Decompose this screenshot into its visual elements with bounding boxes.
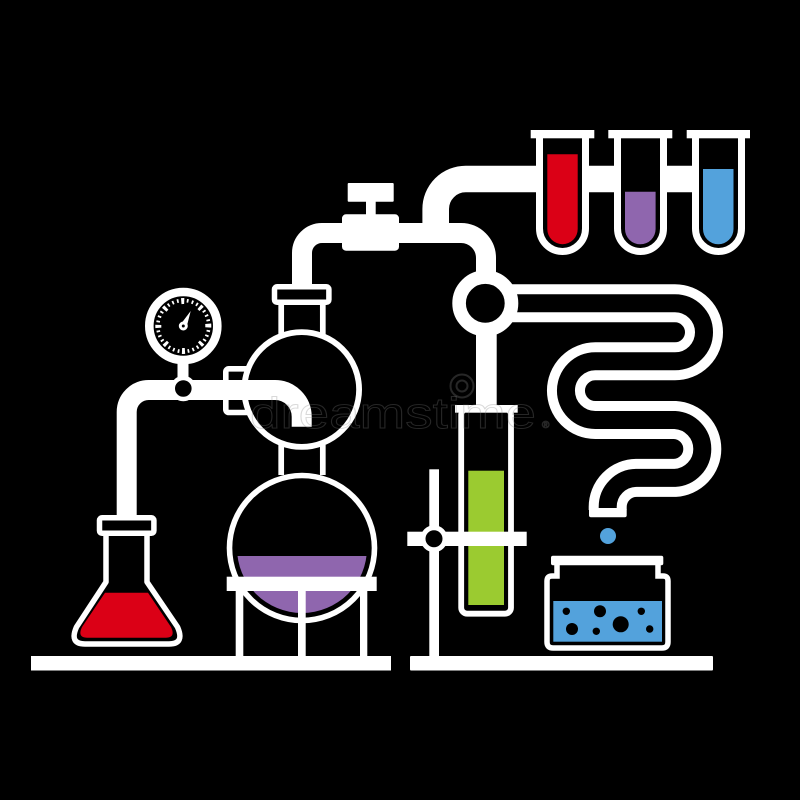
watermark (250, 374, 550, 438)
pipe from flask through gauge valve into sphere (127, 390, 302, 517)
pipe: top to test tubes (436, 179, 694, 228)
lower round flask with purple liquid (230, 476, 375, 620)
red conical flask (74, 518, 180, 644)
upper round flask (244, 332, 359, 447)
junction ring (459, 277, 511, 329)
retort stand rod (429, 469, 439, 656)
stand clamp (407, 528, 527, 550)
vertical pipe into green tube (476, 320, 497, 408)
blue jar with bubbles (547, 556, 668, 648)
connector sleeve on upper sphere (226, 369, 256, 412)
lower neck (281, 445, 323, 475)
upper flask stopper (274, 270, 329, 302)
left table (31, 656, 391, 670)
serpentine condenser tube (490, 303, 704, 517)
pipe: upper bridge from flask to junction (302, 233, 486, 292)
red test tube (531, 130, 594, 252)
chemistry lab apparatus illustration (31, 130, 750, 670)
falling blue drop (600, 528, 616, 544)
green test tube (455, 405, 518, 614)
flask stand (227, 577, 377, 657)
watermark: dreamstime (250, 389, 536, 438)
upper neck (281, 303, 323, 335)
purple test tube (608, 130, 672, 252)
right table (410, 656, 713, 670)
pressure gauge (149, 292, 217, 380)
gauge valve ring (173, 378, 194, 399)
watermark: ® (542, 420, 550, 431)
valve with handle (342, 183, 399, 251)
blue test tube (687, 130, 750, 252)
